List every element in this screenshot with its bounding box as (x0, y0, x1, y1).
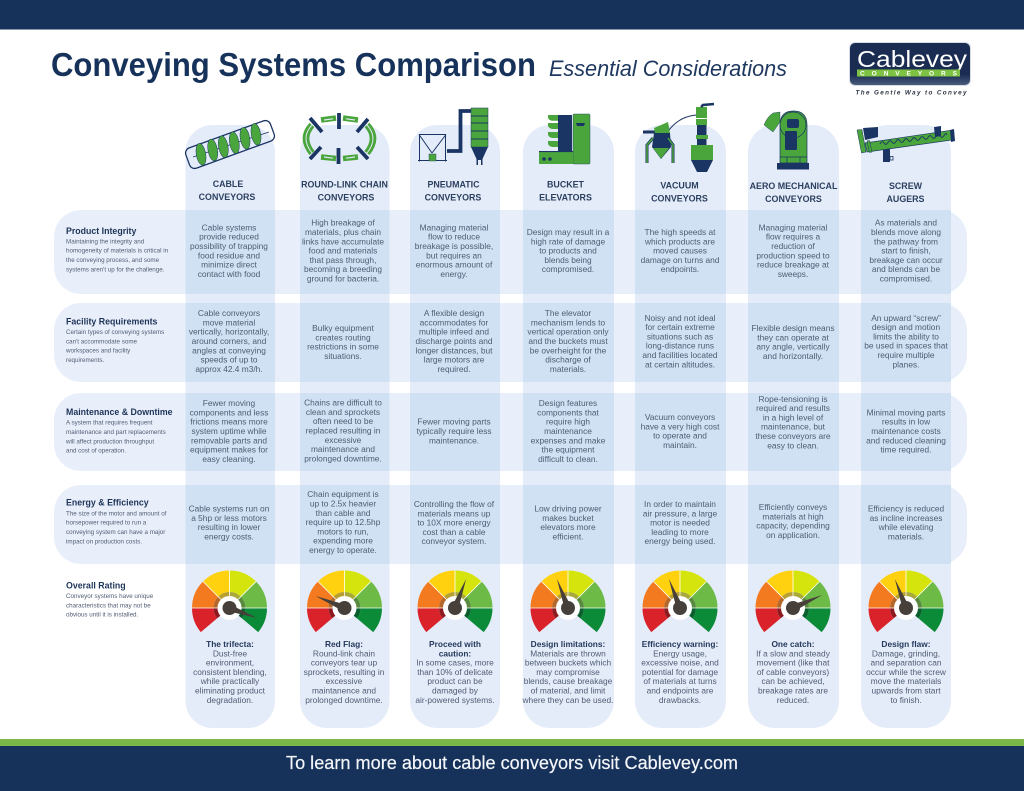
product integrity cell text: becoming a breeding (304, 264, 382, 274)
column headings: PNEUMATIC (427, 180, 480, 190)
product integrity cell text: enormous amount of (416, 260, 493, 270)
row label: maintenance and downtime: A system that requires frequent (66, 420, 153, 427)
energy and efficiency cell text: materials at high (762, 511, 824, 521)
product integrity cell text: ground for bacteria. (307, 274, 379, 284)
product integrity cell text: moved causes (653, 246, 707, 256)
row label: facility requirements: Facility Requirements (66, 316, 158, 326)
facility requirements cell text: move material (203, 317, 255, 327)
maintenance and downtime cell text: typically require less (416, 426, 492, 436)
energy and efficiency cell text: conveyor system. (422, 536, 486, 546)
facility requirements cell text: planes. (893, 359, 919, 369)
energy and efficiency cell text: while elevating (878, 522, 934, 532)
maintenance and downtime cell text: and reduced cleaning (866, 435, 946, 445)
row label: product integrity: Product Integrity (66, 226, 136, 236)
maintenance and downtime cell text: results in low (882, 417, 931, 427)
product integrity cell text: As materials and (875, 218, 937, 228)
energy and efficiency cell text: energy costs. (204, 532, 254, 542)
row label: product integrity: homogeneity of materials is critical in (66, 248, 169, 255)
facility requirements cell text: and facilities located (642, 350, 718, 360)
product integrity cell text: links have accumulate (302, 236, 384, 246)
overall rating text: product can be (427, 676, 483, 686)
overall rating text: maintanence and (312, 686, 376, 696)
energy and efficiency cell text: on application. (766, 530, 820, 540)
row label: overall rating: obvious until it is installed. (66, 612, 139, 619)
facility requirements cell text: required. (438, 364, 470, 374)
overall rating text: Materials are thrown (530, 648, 606, 658)
overall rating text: consistent blending, (193, 667, 267, 677)
overall rating text: where they can be used. (522, 695, 613, 705)
row label: energy and efficiency (66, 498, 167, 545)
maintenance and downtime cell text: easy cleaning. (202, 454, 256, 464)
facility requirements cell text: they can operate at (757, 332, 829, 342)
product integrity cell text: blends move along (871, 227, 941, 237)
maintenance and downtime cell text: maintain. (663, 440, 697, 450)
row label: facility requirements: Certain types of conveying systems (66, 329, 164, 336)
overall rating text: prolonged downtime. (305, 695, 383, 705)
row band: maintenance and downtime (54, 393, 967, 471)
facility requirements cell text: design and motion (872, 322, 940, 332)
gauge: aero mechanical (756, 570, 830, 632)
gauge: round-link chain (307, 570, 382, 632)
product integrity cell text: blends being (544, 255, 592, 265)
maintenance and downtime cell text: Fewer moving parts (417, 417, 491, 427)
facility requirements cell text: vertical operation only (527, 327, 609, 337)
overall rating text: One catch: (771, 639, 815, 649)
column headings: ROUND-LINK CHAIN (301, 180, 388, 190)
overall rating text: of material, and limit (531, 686, 606, 696)
facility requirements cell text: speeds of up to (200, 355, 258, 365)
row label: facility requirements: can't accommodate some (66, 338, 138, 345)
maintenance and downtime cell text: equipment makes for (190, 445, 268, 455)
gauge: vacuum (642, 570, 718, 632)
row band: product integrity (54, 210, 967, 294)
maintenance and downtime cell text: frictions means more (190, 417, 268, 427)
maintenance and downtime cell text: expenses and make (531, 435, 606, 445)
column headings: CONVEYORS (199, 192, 255, 202)
facility requirements cell text: Flexible design means (751, 323, 835, 333)
overall rating text: degradation. (207, 695, 253, 705)
facility requirements cell text: be overheight for the (530, 345, 607, 355)
product integrity cell text: flow requires a (766, 232, 820, 242)
facility requirements cell text: accommodates for (420, 317, 489, 327)
row label: energy and efficiency: The size of the motor and amount of (66, 510, 167, 517)
icon: pneumatic conveyor (418, 108, 488, 165)
footer band (0, 739, 1024, 791)
facility requirements cell text: situations such as (647, 331, 713, 341)
facility requirements cell text: restrictions in some (307, 342, 379, 352)
facility requirements cell text: creates routing (315, 332, 371, 342)
maintenance and downtime cell text: required and results (756, 403, 830, 413)
maintenance and downtime cell text: easy to clean. (767, 440, 819, 450)
maintenance and downtime cell text: require high (546, 417, 590, 427)
energy and efficiency cell text: Efficiently conveys (759, 502, 827, 512)
row label: energy and efficiency: horsepower required to run a (66, 520, 147, 527)
product integrity cell text: breakage can occur (869, 255, 943, 265)
facility requirements cell text: discharge of (545, 355, 591, 365)
maintenance and downtime cell text: these conveyors are (755, 431, 831, 441)
maintenance and downtime cell text (190, 394, 946, 464)
energy and efficiency cell text: Cable systems run on (189, 504, 270, 514)
maintenance and downtime cell text: maintenance. (429, 435, 479, 445)
column headings: CABLE (213, 179, 243, 189)
overall rating text: Efficiency warning: (642, 639, 718, 649)
product integrity cell text: minimize direct (201, 260, 257, 270)
row label: maintenance and downtime: maintenance and part replacements (66, 429, 166, 436)
overall rating text: The trifecta: (206, 639, 254, 649)
row label: product integrity: Maintaining the integrity and (66, 238, 145, 245)
energy and efficiency cell text: Low driving power (534, 504, 602, 514)
row label: overall rating: Overall Rating (66, 580, 126, 590)
energy and efficiency cell text: motor is needed (650, 518, 710, 528)
facility requirements cell text: long-distance runs (646, 341, 714, 351)
subtitle: Essential Considerations (549, 56, 787, 81)
maintenance and downtime cell text: have a very high cost (641, 421, 720, 431)
facility requirements cell text: for certain extreme (645, 322, 715, 332)
overall rating text: Damage, grinding, (872, 648, 940, 658)
column bands (186, 125, 951, 728)
overall rating text: In some cases, more (416, 658, 494, 668)
overall rating text: caution: (439, 648, 471, 658)
overall rating text: Red Flag: (325, 639, 363, 649)
product integrity cell text: food residue and (198, 250, 260, 260)
product integrity cell text: contact with food (198, 269, 261, 279)
icon: bucket elevator (539, 114, 590, 164)
overall rating text: Design flaw: (881, 639, 931, 649)
icon: cable conveyor (184, 119, 276, 170)
column headings: CONVEYORS (765, 194, 822, 204)
header band (0, 0, 1024, 30)
product integrity cell text: and blends can be (872, 264, 940, 274)
maintenance and downtime cell text: removable parts and (191, 435, 267, 445)
overall rating text: can be achieved, (761, 676, 825, 686)
maintenance and downtime cell text: maintenance and (311, 444, 375, 454)
product integrity cell text: start to finish, (881, 246, 931, 256)
row label: product integrity: the conveying process, and some (66, 257, 160, 264)
column headings: CONVEYORS (318, 192, 374, 202)
gauge: cable conveyors (192, 570, 267, 632)
overall rating text: eliminating product (195, 686, 266, 696)
overall rating text: reduced. (777, 695, 809, 705)
product integrity cell text: high rate of damage (531, 236, 605, 246)
column headings: CONVEYORS (425, 192, 481, 202)
product integrity cell text: food and materials (309, 246, 377, 256)
product integrity cell text: which products are (644, 236, 715, 246)
overall rating text: environment, (206, 658, 254, 668)
facility requirements cell text: mechanism lends to (531, 317, 605, 327)
row label: maintenance and downtime: Maintenance & Downtime (66, 407, 173, 417)
energy and efficiency cell text (189, 489, 945, 555)
overall rating text: of materials at turns (643, 676, 717, 686)
product integrity cell text: Managing material (759, 222, 827, 232)
overall rating text: may compromise (536, 667, 600, 677)
title: Conveying Systems Comparison (51, 47, 536, 84)
icon: vacuum conveyor (643, 104, 714, 172)
energy and efficiency cell text: than cable and (316, 508, 371, 518)
maintenance and downtime cell text: components and less (190, 407, 268, 417)
facility requirements cell text: multiple infeed and (419, 327, 489, 337)
maintenance and downtime cell text: Design features (539, 398, 597, 408)
product integrity cell text: Cable systems (202, 222, 256, 232)
product integrity cell text: provide reduced (199, 232, 259, 242)
facility requirements cell text: large motors are (424, 355, 485, 365)
facility requirements cell text: limits the ability to (873, 331, 939, 341)
row label: maintenance and downtime (65, 407, 173, 455)
energy and efficiency cell text: materials. (888, 532, 924, 542)
facility requirements cell text: situations. (324, 351, 362, 361)
overall rating text: of cable conveyors) (757, 667, 829, 677)
facility requirements cell text: Bulky equipment (312, 323, 375, 333)
footer call to action: To learn more about cable conveyors visit Cablevey.com (286, 753, 738, 773)
maintenance and downtime cell text: Minimal moving parts (867, 407, 945, 417)
maintenance and downtime cell text: excessive (325, 435, 362, 445)
facility requirements cell text: Noisy and not ideal (645, 313, 716, 323)
row label: energy and efficiency: Energy & Efficiency (66, 498, 149, 508)
product integrity cell text: flow to reduce (428, 232, 480, 242)
overall rating text: move the materials (871, 676, 941, 686)
overall rating text: than 10% of delicate (417, 667, 493, 677)
maintenance and downtime cell text: Chains are difficult to (304, 398, 382, 408)
facility requirements cell text: angles at conveying (192, 345, 266, 355)
product integrity cell text: materials, plus chain (305, 227, 381, 237)
facility requirements cell text: Cable conveyors (198, 308, 260, 318)
facility requirements cell text: A flexible design (424, 308, 485, 318)
facility requirements cell text: longer distances, but (416, 345, 493, 355)
facility requirements cell text: materials. (550, 364, 586, 374)
overall rating text: Energy usage, (653, 648, 707, 658)
maintenance and downtime cell text: in a high level of (763, 412, 824, 422)
gauge: pneumatic (418, 570, 492, 632)
facility requirements cell text: discharge points and (415, 336, 493, 346)
row label: product integrity: systems aren't up for the challenge. (66, 266, 165, 273)
facility requirements cell text: and the buckets must (528, 336, 608, 346)
overall rating text: blends, cause breakage (524, 676, 613, 686)
column headings: VACUUM (660, 180, 699, 190)
overall rating text: Design limitations: (531, 639, 605, 649)
energy and efficiency cell text: In order to maintain (644, 499, 716, 509)
logo: Cablevey (849, 42, 971, 96)
overall rating text: drawbacks. (659, 695, 701, 705)
row band: energy and efficiency (54, 485, 967, 564)
product integrity cell text: the pathway from (874, 236, 938, 246)
maintenance and downtime cell text: maintenance costs (871, 426, 941, 436)
row label: product integrity (66, 226, 169, 273)
product integrity cell text: to products and (539, 246, 597, 256)
maintenance and downtime cell text: system uptime while (191, 426, 267, 436)
maintenance and downtime cell text: maintenance (544, 426, 592, 436)
maintenance and downtime cell text: prolonged downtime. (304, 453, 382, 463)
overall rating text: breakage rates are (758, 686, 828, 696)
overall rating text: sprockets, resulting in (304, 667, 385, 677)
overall rating text: to finish. (890, 695, 922, 705)
product integrity cell text: endpoints. (661, 264, 699, 274)
column headings: AERO MECHANICAL (750, 181, 838, 191)
row label: facility requirements (65, 316, 164, 364)
product integrity cell text: compromised. (880, 274, 932, 284)
product integrity cell text: energy. (440, 269, 468, 279)
row label: facility requirements: requirements. (66, 357, 104, 364)
overall rating text: occur while the screw (866, 667, 947, 677)
row label: energy and efficiency: conveying system can have a major (66, 529, 165, 536)
maintenance and downtime cell text: Fewer moving (203, 398, 256, 408)
overall rating text: potential for damage (642, 667, 718, 677)
energy and efficiency cell text: capacity, depending (756, 521, 830, 531)
maintenance and downtime cell text: difficult to clean. (538, 454, 598, 464)
row label: overall rating: characteristics that may not be (66, 602, 151, 609)
product integrity cell text: High breakage of (311, 218, 375, 228)
row and column overlap cells (186, 200, 951, 570)
energy and efficiency cell text: elevators more (540, 522, 596, 532)
product integrity cell text: sweeps. (778, 269, 808, 279)
maintenance and downtime cell text: the equipment (542, 445, 595, 455)
overall rating text: movement (like that (757, 658, 830, 668)
facility requirements cell text: The elevator (545, 308, 591, 318)
overall rating text: If a slow and steady (756, 648, 831, 658)
overall rating text: between buckets which (525, 658, 611, 668)
product integrity cell text: production speed to (756, 250, 830, 260)
icon: screw auger (857, 126, 955, 162)
overall rating text: air-powered systems. (415, 695, 495, 705)
energy and efficiency cell text: energy to operate. (309, 545, 377, 555)
column headings: SCREW (889, 181, 923, 191)
gauge: screw augers (868, 570, 944, 632)
energy and efficiency cell text: Chain equipment is (307, 489, 379, 499)
facility requirements cell text: around corners, and (192, 336, 267, 346)
facility requirements cell text: approx 42.4 m3/h. (195, 364, 263, 374)
facility requirements cell text: and horizontally. (763, 351, 823, 361)
product integrity cell text: reduction of (771, 241, 815, 251)
product integrity cell text (190, 218, 943, 284)
energy and efficiency cell text: up to 2.5x heavier (310, 498, 376, 508)
energy and efficiency cell text: air pressure, a large (643, 508, 717, 518)
overall rating text: Proceed with (429, 639, 481, 649)
column headings (199, 179, 925, 204)
overall rating text: Round-link chain (313, 648, 375, 658)
facility requirements cell text: at certain altitudes. (645, 359, 715, 369)
row band: facility requirements (54, 303, 967, 382)
maintenance and downtime cell text: to operate and (653, 431, 707, 441)
row label: maintenance and downtime: will affect production throughput (65, 438, 154, 445)
energy and efficiency cell text: require up to 12.5hp (306, 517, 381, 527)
energy and efficiency cell text: motors to run, (317, 526, 369, 536)
maintenance and downtime cell text: Vacuum conveyors (645, 412, 715, 422)
overall rating text: and endpoints are (647, 686, 714, 696)
overall rating text: Dust-free (213, 648, 248, 658)
logo: Cablevey: The Gentle Way to Convey (856, 90, 967, 96)
energy and efficiency cell text: makes bucket (542, 513, 594, 523)
overall rating text: excessive (326, 676, 363, 686)
product integrity cell text: compromised. (542, 264, 594, 274)
energy and efficiency cell text: Efficiency is reduced (868, 504, 945, 514)
gauge: bucket elevators (530, 570, 606, 632)
maintenance and downtime cell text: replaced resulting in (306, 426, 381, 436)
product integrity cell text: The high speeds at (645, 227, 716, 237)
maintenance and downtime cell text: components that (537, 407, 600, 417)
facility requirements cell text: require multiple (877, 350, 935, 360)
product integrity cell text: that pass through, (310, 255, 376, 265)
column headings: CONVEYORS (651, 194, 708, 204)
product integrity cell text: Design may result in a (527, 227, 610, 237)
facility requirements cell text: any angle, vertically (756, 342, 830, 352)
energy and efficiency cell text: Controlling the flow of (414, 499, 495, 509)
product integrity cell text: Managing material (420, 222, 488, 232)
energy and efficiency cell text: resulting in lower (198, 522, 261, 532)
row label: energy and efficiency: impact on production costs. (66, 538, 142, 545)
icon: aero mechanical conveyor (764, 111, 809, 170)
maintenance and downtime cell text: Rope-tensioning is (758, 394, 828, 404)
product integrity cell text: but requires an (426, 250, 482, 260)
facility requirements cell text: vertically, horizontally, (189, 327, 269, 337)
product integrity cell text: damage on turns and (641, 255, 720, 265)
energy and efficiency cell text: energy being used. (645, 536, 715, 546)
product integrity cell text: reduce breakage at (757, 260, 830, 270)
icon: round-link chain (306, 113, 373, 164)
product integrity cell text: possibility of trapping (190, 241, 268, 251)
energy and efficiency cell text: leading to more (651, 527, 709, 537)
maintenance and downtime cell text: often need to be (313, 416, 374, 426)
energy and efficiency cell text: cost than a cable (422, 527, 486, 537)
overall rating text: while practically (200, 676, 260, 686)
overall rating text: conveyors tear up (311, 658, 378, 668)
overall rating text (193, 639, 947, 705)
facility requirements cell text: be used in spaces that (864, 341, 948, 351)
maintenance and downtime cell text: maintenance, but (761, 422, 826, 432)
overall rating text: and separation can (871, 658, 942, 668)
row label: overall rating (66, 580, 154, 619)
energy and efficiency cell text: expending more (313, 536, 373, 546)
column headings: BUCKET (547, 180, 585, 190)
logo: Cablevey: Cablevey (857, 46, 967, 72)
overall rating text: upwards from start (871, 686, 941, 696)
product integrity cell text: breakage is possible, (415, 241, 493, 251)
energy and efficiency cell text: to 10X more energy (417, 518, 491, 528)
column headings: ELEVATORS (539, 192, 592, 202)
row label: facility requirements: workspaces and facility (65, 348, 131, 355)
column headings: AUGERS (887, 194, 925, 204)
maintenance and downtime cell text: time required. (880, 445, 932, 455)
facility requirements cell text (189, 308, 948, 374)
overall rating text: excessive noise, and (641, 658, 719, 668)
energy and efficiency cell text: efficient. (553, 532, 583, 542)
energy and efficiency cell text: materials means up (418, 508, 491, 518)
row label: overall rating: Conveyor systems have unique (66, 593, 154, 600)
facility requirements cell text: An upward “screw” (871, 313, 941, 323)
overall rating text: damaged by (432, 686, 479, 696)
row label: maintenance and downtime: and cost of operation. (66, 448, 126, 455)
energy and efficiency cell text: as incline increases (870, 513, 942, 523)
energy and efficiency cell text: a 5hp or less motors (191, 513, 267, 523)
maintenance and downtime cell text: clean and sprockets (306, 407, 380, 417)
logo: Cablevey: CONVEYORS (860, 71, 958, 78)
